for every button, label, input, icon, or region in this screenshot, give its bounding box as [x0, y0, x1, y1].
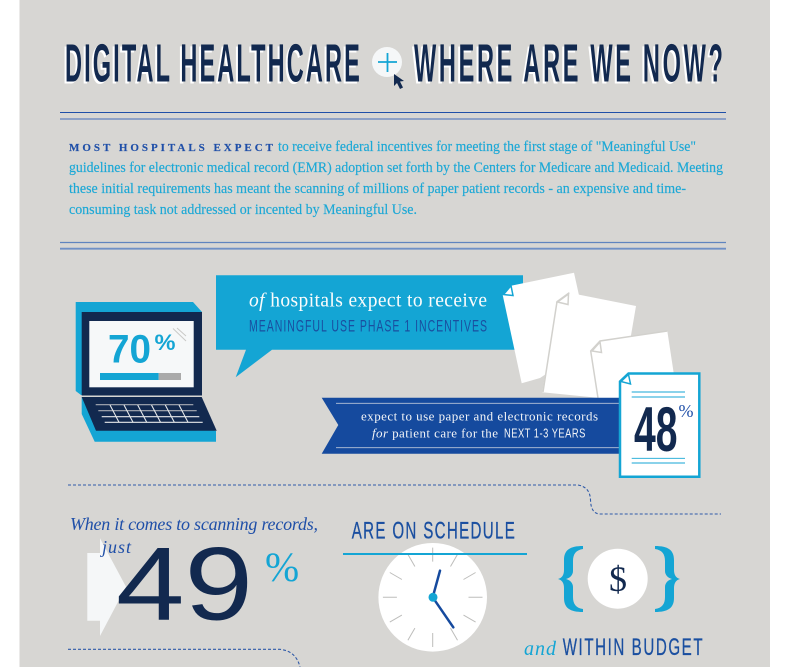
laptop screen value	[108, 328, 176, 372]
value 49 percent: 49	[116, 526, 253, 642]
laptop screen value: %	[154, 330, 176, 355]
laptop keyboard	[96, 405, 203, 422]
callout: speech bubble 70 percent	[216, 275, 523, 377]
heading: and within budget: WITHIN BUDGET	[563, 635, 703, 661]
heading: and within budget: and	[524, 638, 557, 660]
icon: clock	[378, 543, 487, 652]
title: digital healthcare: DIGITAL HEALTHCARE	[65, 34, 360, 93]
callout: speech bubble 70 percent: MEANINGFUL USE PHASE 1 INCENTIVES	[249, 316, 487, 335]
value 49 percent	[116, 526, 299, 642]
heading: are on schedule: ARE ON SCHEDULE	[352, 518, 515, 544]
banner: expect to use paper and electronic records	[322, 398, 619, 454]
value 48 percent: 48	[634, 395, 678, 465]
intro text block: these initial requirements has meant the scanning of millions of paper patient records - an expensive and time-	[69, 181, 686, 197]
icon: dollar in braces	[558, 546, 680, 612]
laptop screen value: 70	[108, 328, 151, 372]
paper sheet 2	[542, 293, 636, 400]
icon: stacked paper sheets	[503, 273, 674, 400]
icon: laptop showing 70%	[76, 302, 217, 442]
intro text block: to receive federal incentives for meeting the first stage of "Meaningful Use"	[278, 139, 696, 155]
icon: pale arrow	[87, 538, 126, 636]
value 48 percent: %	[678, 401, 694, 421]
intro text block: guidelines for electronic medical record (EMR) adoption set forth by the Centers for Medicare and Medicaid. Meeting	[69, 160, 723, 176]
icon: dollar in braces: $	[609, 559, 627, 599]
title	[63, 34, 723, 95]
title: where are we now: WHERE ARE WE NOW?	[412, 36, 721, 95]
text: when it comes to scanning records: When it comes to scanning records,	[70, 514, 318, 534]
paper sheet 1	[503, 273, 590, 383]
paper sheet 3	[591, 331, 674, 400]
banner: expect to use paper and electronic records: NEXT 1-3 YEARS	[504, 427, 586, 441]
banner: expect to use paper and electronic records: for patient care for the	[372, 426, 498, 441]
icon: plus button with cursor	[372, 47, 404, 89]
title: digital healthcare: DIGITAL HEALTHCARE	[63, 36, 358, 95]
title: where are we now: WHERE ARE WE NOW?	[414, 34, 723, 93]
banner: expect to use paper and electronic records: expect to use paper and electronic records	[361, 409, 598, 424]
callout: speech bubble 70 percent: of hospitals expect to receive	[249, 291, 487, 312]
intro text block: MOST HOSPITALS EXPECT	[69, 142, 274, 154]
text: when it comes to scanning records: just	[100, 537, 132, 557]
icon: document with 48%	[620, 374, 699, 477]
intro text block: consuming task not addressed or incented by Meaningful Use.	[69, 202, 417, 218]
intro text block	[69, 139, 723, 218]
text: when it comes to scanning records	[70, 514, 318, 557]
laptop progress bar	[100, 373, 181, 380]
value 49 percent: %	[265, 544, 299, 590]
